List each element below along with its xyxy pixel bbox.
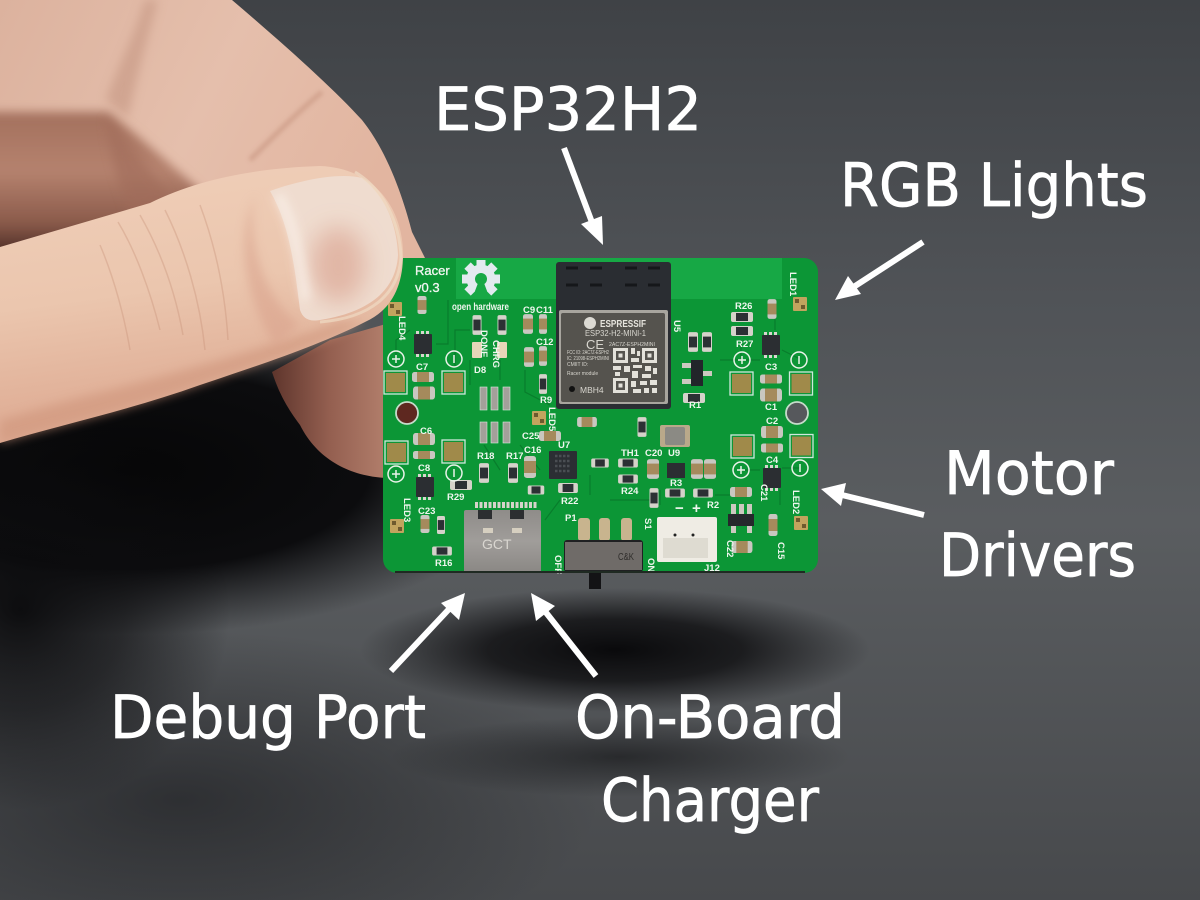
silkscreen labels: CHRG: [490, 340, 501, 368]
icon: finger behind board: [272, 320, 400, 478]
board title: v0.3: [415, 280, 440, 295]
USB-C connector: [464, 505, 541, 573]
arrow: On-Board Charger: [531, 593, 596, 676]
silkscreen labels: R26: [735, 301, 752, 312]
USB-C connector: GCT: [482, 536, 512, 552]
thumb wrinkles: [100, 205, 228, 350]
panel: PCB: [383, 258, 818, 573]
silkscreen labels: R27: [736, 339, 753, 350]
silkscreen labels: C9: [523, 305, 535, 316]
silkscreen labels: C1: [765, 402, 778, 413]
ESP32 antenna module: [556, 262, 671, 409]
label: Debug Port: Debug Port: [110, 683, 426, 753]
silkscreen labels: C6: [420, 426, 432, 437]
silkscreen labels: C15: [775, 542, 786, 560]
ESP32H2 module: Racer module: [567, 371, 598, 377]
silkscreen labels: C12: [536, 337, 553, 348]
silkscreen labels: U5: [671, 320, 682, 333]
RGB LEDs: [388, 297, 808, 533]
silkscreen labels: R17: [506, 451, 523, 462]
arrow: Debug Port: [391, 593, 465, 671]
folded lower finger: [0, 112, 200, 260]
silkscreen labels: C22: [724, 540, 735, 557]
antenna keepout area: [456, 258, 782, 299]
silkscreen labels: ON: [645, 558, 656, 572]
icon: open hardware logo: open hardware: [452, 301, 509, 313]
silkscreen labels: D8: [474, 365, 486, 376]
silkscreen labels: LED5: [546, 407, 557, 432]
silkscreen labels: [396, 272, 801, 574]
icon: thumb: [0, 166, 403, 443]
silkscreen labels: C11: [536, 305, 554, 316]
charger chip U7: [549, 451, 577, 479]
ESP32H2 module: CMIIT ID:: [567, 362, 588, 368]
silkscreen labels: LED2: [790, 490, 801, 514]
slide switch: [564, 518, 643, 589]
copper tracks: [396, 300, 800, 520]
silkscreen labels: C21: [758, 484, 769, 502]
silkscreen labels: C3: [765, 362, 777, 373]
silkscreen labels: R22: [561, 496, 578, 507]
arrow: ESP32H2: [564, 148, 603, 245]
silkscreen labels: C2: [766, 416, 778, 427]
silkscreen labels: TH1: [621, 448, 640, 459]
board bottom edge: [395, 571, 805, 573]
inductor L1: [660, 425, 690, 447]
silkscreen labels: −: [675, 500, 684, 517]
silkscreen labels: R3: [670, 478, 682, 489]
silkscreen labels: J12: [704, 563, 720, 574]
silkscreen labels: R24: [621, 486, 639, 497]
silkscreen labels: R18: [477, 451, 494, 462]
ESP32H2 module: IC: 21098-ESPH2MINI: [567, 356, 609, 362]
ESP32H2 module: MBH4: [580, 385, 604, 395]
silkscreen labels: R1: [689, 400, 702, 411]
silkscreen labels: R9: [540, 395, 552, 406]
silkscreen labels: C25: [522, 431, 540, 442]
silkscreen labels: R29: [447, 492, 464, 503]
silkscreen labels: R2: [707, 500, 719, 511]
label: ESP32H2: ESP32H2: [434, 75, 702, 145]
label: Motor Drivers: Drivers: [939, 521, 1136, 591]
chip U9: [667, 463, 685, 478]
silkscreen labels: C7: [416, 362, 428, 373]
connector pads: [384, 371, 813, 464]
transistor Q1: [682, 360, 712, 386]
status LEDs D8 D9: [472, 342, 507, 358]
ESP32H2 module: ESPRESSIF: [600, 318, 646, 330]
silkscreen labels: +: [692, 500, 701, 517]
ESP32H2 module: ESP32-H2-MINI-1: [585, 329, 647, 338]
board title: [415, 263, 450, 295]
arrow: RGB Lights: [835, 242, 923, 300]
silkscreen labels: U7: [558, 440, 570, 451]
silkscreen labels: U9: [668, 448, 680, 459]
icon: QR code: [613, 348, 657, 393]
finger crease shading: [106, 0, 158, 118]
board title: Racer: [415, 263, 450, 278]
hand: [0, 0, 425, 443]
label: On-Board Charger: Charger: [601, 766, 819, 836]
silkscreen labels: P1: [565, 513, 577, 524]
resistors: [432, 312, 753, 556]
silkscreen labels: DONE: [478, 330, 489, 357]
silkscreen labels: C16: [524, 445, 541, 456]
silkscreen labels: C20: [645, 448, 662, 459]
battery connector: [657, 517, 717, 562]
icon: open hardware logo: [452, 260, 509, 313]
label: Motor Drivers: [939, 439, 1136, 591]
label: RGB Lights: RGB Lights: [840, 151, 1148, 221]
silkscreen labels: LED1: [787, 272, 798, 297]
ESP32H2 module: [559, 310, 668, 404]
silkscreen polarity symbols: [388, 351, 808, 482]
icon: mounting holes: [396, 402, 808, 424]
arrow: Motor Drivers: [821, 483, 924, 515]
silkscreen labels: C23: [418, 506, 435, 517]
icon: index finger: [0, 0, 425, 258]
silkscreen labels: R16: [435, 558, 452, 569]
label: Motor Drivers: Motor: [944, 439, 1114, 509]
regulator U6: [728, 504, 754, 533]
ESP32H2 module: 2AC7Z-ESPH2MINI: [609, 342, 655, 348]
test pads J10: [480, 387, 510, 443]
capacitors: [412, 296, 783, 553]
silkscreen labels: LED4: [396, 316, 407, 341]
silkscreen labels: C4: [766, 455, 779, 466]
silkscreen labels: LED3: [401, 498, 412, 522]
slide switch: C&K: [618, 552, 634, 563]
board: [383, 258, 818, 589]
silkscreen labels: OFF: [552, 555, 563, 574]
label: On-Board Charger: [575, 683, 845, 836]
motor driver chips: [414, 331, 781, 500]
thumb lower shading: [0, 322, 365, 443]
silkscreen labels: C8: [418, 463, 430, 474]
ESP32H2 module: CE: [586, 337, 604, 352]
label: On-Board Charger: On-Board: [575, 683, 845, 753]
ESP32H2 module: FCC ID: 2AC7Z-ESPH2: [567, 350, 609, 356]
icon: thumbnail: [270, 172, 401, 322]
silkscreen labels: S1: [642, 518, 653, 530]
